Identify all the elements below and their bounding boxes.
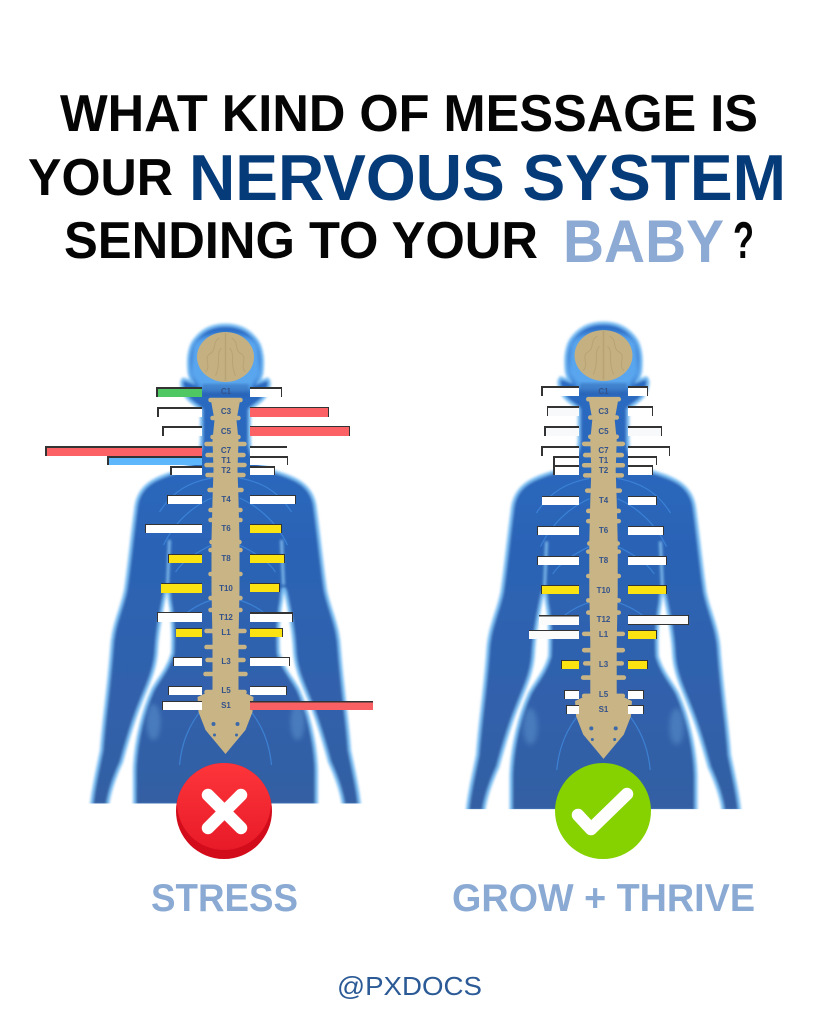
vertebra labels: stress: C7	[221, 446, 232, 455]
vertebra labels: grow and thrive: T6	[599, 526, 609, 535]
right bars: grow and thrive	[628, 386, 689, 714]
vertebra labels: grow and thrive: C5	[598, 427, 609, 436]
vertebra labels: stress: L1	[221, 628, 231, 637]
vertebra labels: stress: T4	[221, 495, 231, 504]
vertebra labels: stress: C1	[221, 387, 232, 396]
label: grow and thrive: GROW + THRIVE	[452, 877, 755, 920]
vertebra labels: stress: L5	[221, 686, 231, 695]
vertebra labels: stress: T6	[221, 524, 231, 533]
label: stress: STRESS	[151, 877, 298, 920]
right bars: stress	[250, 387, 373, 710]
vertebra labels: grow and thrive: L1	[599, 630, 609, 639]
vertebra labels: grow and thrive: C3	[598, 407, 609, 416]
vertebra labels: stress	[219, 387, 233, 710]
vertebra labels: grow and thrive: S1	[599, 705, 609, 714]
left bars: stress	[45, 387, 202, 710]
vertebra labels: stress: T8	[221, 554, 231, 563]
icon: red cross	[176, 756, 272, 859]
vertebra labels: stress: C5	[221, 427, 232, 436]
body illustration: stress	[92, 325, 360, 806]
vertebra labels: stress: L3	[221, 657, 231, 666]
title word: your: YOUR	[28, 149, 173, 207]
title	[28, 85, 786, 275]
title line 1: WHAT KIND OF MESSAGE IS	[60, 85, 758, 143]
vertebra labels: grow and thrive: T1	[599, 456, 609, 465]
title highlight: baby: BABY	[563, 208, 724, 275]
vertebra labels: grow and thrive: T10	[597, 586, 611, 595]
vertebra labels: grow and thrive: L3	[599, 660, 609, 669]
body illustration: grow and thrive	[467, 323, 740, 812]
vertebra labels: stress: T10	[219, 584, 233, 593]
vertebra labels: stress: T2	[221, 466, 231, 475]
vertebra labels: stress: T1	[221, 456, 231, 465]
vertebra labels: grow and thrive: T2	[599, 466, 609, 475]
vertebra labels: grow and thrive: T8	[599, 556, 609, 565]
vertebra labels: grow and thrive: T4	[599, 496, 609, 505]
vertebra labels: stress: C3	[221, 407, 232, 416]
vertebra labels: grow and thrive	[597, 387, 611, 714]
vertebra labels: stress: T12	[219, 613, 233, 622]
vertebra labels: grow and thrive: C1	[598, 387, 609, 396]
handle: @PXDOCS	[337, 971, 482, 1001]
title highlight: nervous system: NERVOUS SYSTEM	[189, 141, 786, 214]
left bars: grow and thrive	[529, 386, 579, 714]
panel: grow and thrive spine figure	[467, 323, 740, 812]
vertebra labels: grow and thrive: C7	[598, 446, 609, 455]
title line 3: SENDING TO YOUR	[64, 212, 538, 270]
title question mark: ?	[733, 212, 754, 270]
vertebra labels: grow and thrive: T12	[597, 615, 611, 624]
vertebra labels: grow and thrive: L5	[599, 690, 609, 699]
vertebra labels: stress: S1	[221, 701, 231, 710]
panel: stress spine figure	[45, 325, 373, 806]
icon: green check	[555, 763, 651, 859]
